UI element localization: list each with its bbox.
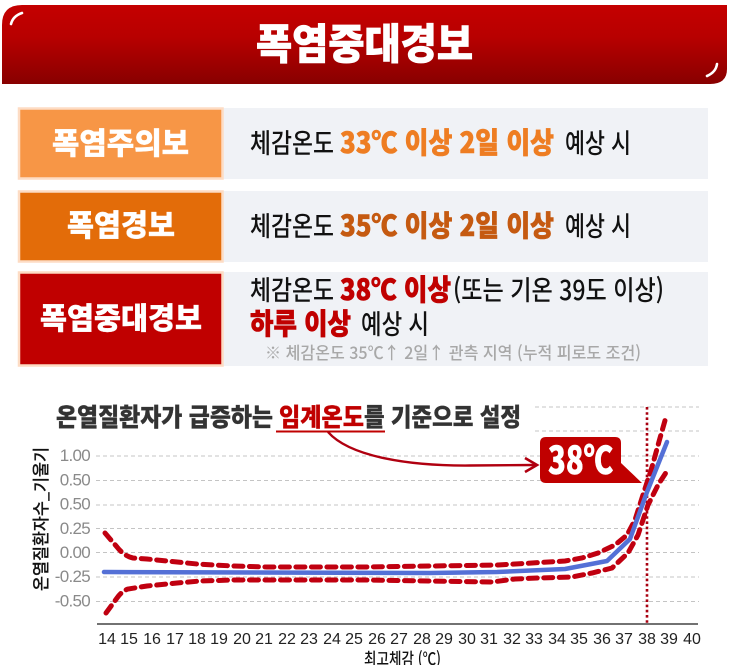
x axis labels: 14 (98, 631, 116, 648)
x axis labels: 27 (390, 631, 408, 648)
lower confidence band (106, 471, 667, 613)
x axis labels: 19 (210, 631, 228, 648)
x axis labels: 30 (458, 631, 476, 648)
x axis labels: 17 (166, 631, 184, 648)
y axis labels (55, 446, 90, 610)
chart heading: 임계온도 (279, 398, 364, 434)
x axis labels: 32 (503, 631, 521, 648)
y axis labels: 0.25 (60, 519, 90, 538)
x axis labels: 29 (435, 631, 453, 648)
y axis labels: -0.50 (55, 592, 90, 610)
panel: 폭염주의보: 예상 시 (565, 122, 631, 161)
panel: 폭염경보: 폭염경보 (67, 201, 175, 245)
x axis labels: 40 (683, 631, 701, 648)
x axis labels: 16 (143, 631, 161, 648)
panel: 폭염중대경보: 38℃ 이상 (340, 267, 451, 309)
upper confidence band (105, 417, 666, 567)
y axis labels: 1.00 (60, 446, 90, 465)
chart heading (56, 398, 521, 434)
x axis labels: 34 (548, 631, 566, 648)
line chart (27, 407, 701, 665)
x axis labels: 38 (638, 631, 656, 648)
arrow to callout (328, 432, 537, 472)
y axis labels: 0.00 (60, 543, 90, 562)
panel: 폭염중대경보: (또는 기온 39도 이상) (453, 269, 664, 308)
panel: 폭염경보: 체감온도 (250, 205, 334, 244)
y axis title: 온열질환자수_기울기 (27, 447, 52, 591)
x axis labels (98, 631, 701, 648)
x axis labels: 39 (660, 631, 678, 648)
panel: 폭염경보 (19, 191, 708, 262)
panel: 폭염주의보: 폭염주의보 (52, 119, 189, 163)
panel: 폭염주의보: 체감온도 (250, 122, 334, 161)
chart heading: 를 기준으로 설정 (364, 398, 521, 434)
mean line (104, 442, 667, 573)
panel: 폭염주의보: 33℃ 이상 2일 이상 (340, 120, 554, 162)
title banner (2, 5, 727, 84)
x axis labels: 15 (120, 631, 138, 648)
x axis labels: 26 (368, 631, 386, 648)
panel: 폭염주의보 (19, 108, 708, 179)
panel: 폭염중대경보 (19, 267, 708, 366)
chart heading: 온열질환자가 급증하는 (56, 398, 273, 434)
x axis labels: 33 (525, 631, 543, 648)
panel: 폭염중대경보: 하루 이상 (250, 301, 351, 343)
x axis labels: 24 (323, 631, 341, 648)
x axis labels: 31 (480, 631, 498, 648)
x axis labels: 37 (615, 631, 633, 648)
panel: 폭염경보: 35℃ 이상 2일 이상 (340, 203, 554, 245)
x axis labels: 28 (413, 631, 431, 648)
x axis line (97, 623, 698, 625)
y axis labels: 0.50 (60, 494, 90, 514)
threshold line at 38 (646, 407, 648, 624)
panel: 폭염중대경보: ※ 체감온도 35℃↑ 2일↑ 관측 지역 (누적 피로도 조건) (265, 339, 641, 364)
panel: 폭염중대경보: 예상 시 (361, 303, 429, 342)
panel: 폭염중대경보: 체감온도 (250, 269, 334, 308)
callout: 38℃: 38℃ (548, 430, 613, 485)
panel: 폭염경보: 예상 시 (565, 205, 631, 244)
x axis labels: 20 (233, 631, 251, 648)
x axis labels: 36 (593, 631, 611, 648)
title: 폭염중대경보 (256, 11, 473, 72)
x axis labels: 22 (278, 631, 296, 648)
y axis labels: -0.25 (55, 567, 90, 586)
x axis labels: 23 (300, 631, 318, 648)
x axis labels: 35 (570, 631, 588, 648)
panel: 폭염중대경보: 폭염중대경보 (40, 294, 202, 338)
x axis labels: 21 (255, 631, 273, 648)
x axis labels: 25 (345, 631, 363, 648)
y axis labels: 0.50 (60, 470, 90, 490)
x axis labels: 18 (188, 631, 206, 648)
